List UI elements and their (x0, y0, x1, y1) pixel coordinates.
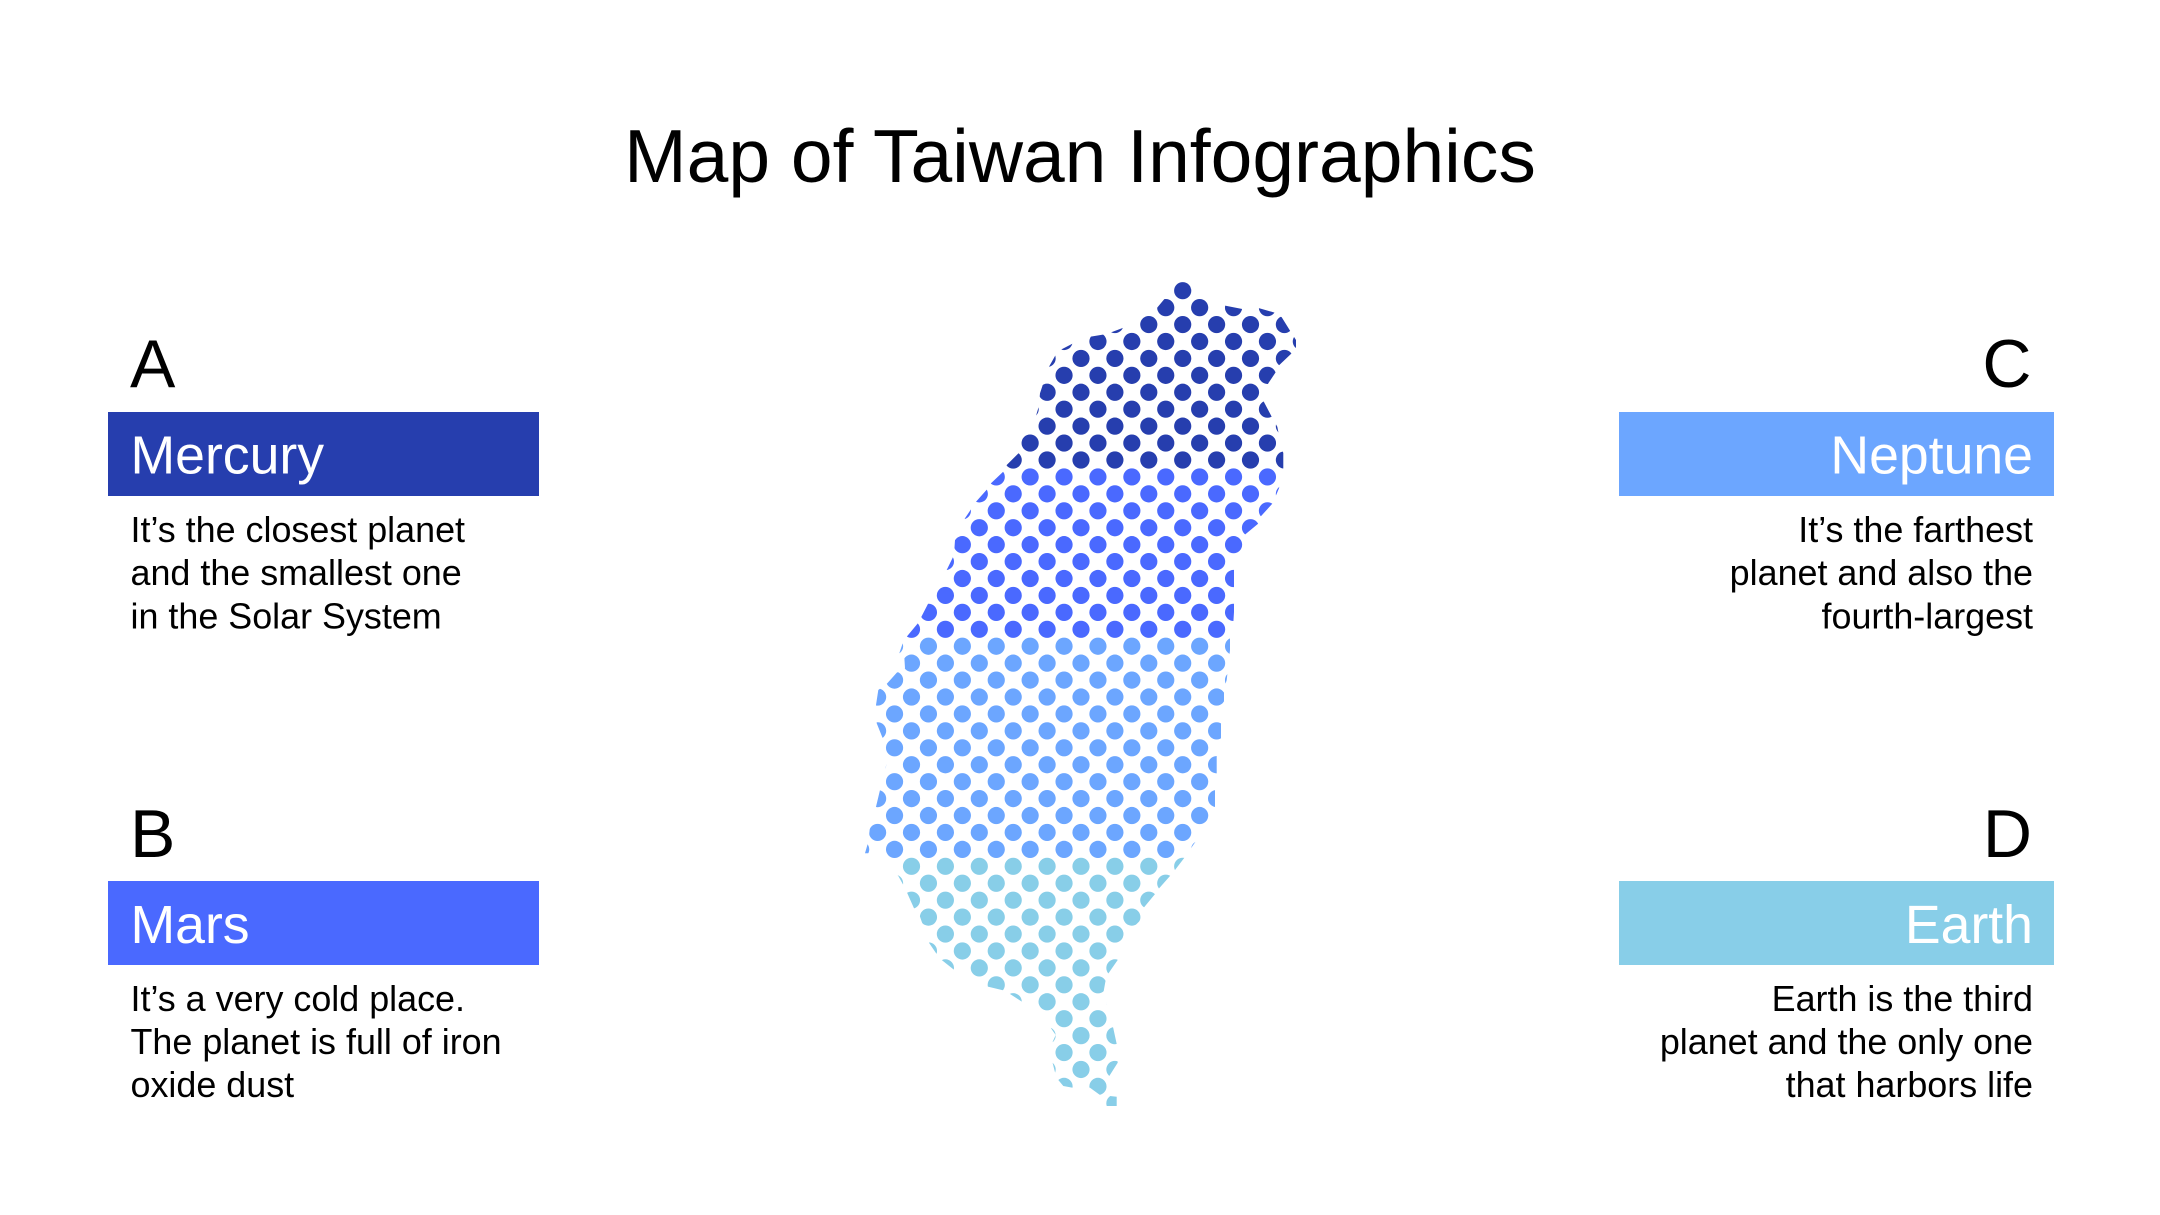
description: Mars: It’s a very cold place. (130, 979, 465, 1019)
description: Mars: The planet is full of iron (130, 1022, 502, 1062)
letter C: C (1982, 326, 2032, 402)
bar: Mars (108, 881, 539, 965)
dots: lower-middle region, light blue (865, 638, 1230, 858)
bar: Neptune: Neptune (1830, 426, 2033, 486)
title: Map of Taiwan Infographics (624, 114, 1536, 198)
dots: upper-middle region, medium blue (907, 468, 1280, 638)
panel: C Neptune (1619, 326, 2054, 636)
description: Neptune: planet and also the (1730, 553, 2033, 593)
bar: Neptune (1619, 412, 2054, 496)
letter A: A (130, 326, 176, 402)
letter B: B (130, 796, 175, 872)
dots: southern region, cyan (898, 858, 1184, 1106)
description: Mars: oxide dust (130, 1065, 294, 1105)
description: Earth: Earth is the third (1772, 979, 2033, 1019)
dots: northern region, dark blue (1006, 282, 1296, 469)
description: Neptune: It’s the farthest (1798, 510, 2033, 550)
map: halftone dotted Taiwan (844, 291, 1320, 1103)
panel: D Earth (1619, 796, 2054, 1105)
description: Mercury: It’s the closest planet (130, 510, 465, 550)
bar: Earth (1619, 881, 2054, 965)
description: Mercury: in the Solar System (130, 596, 442, 636)
panel: A Mercury (108, 326, 539, 636)
bar: Mercury (108, 412, 539, 496)
description: Earth: planet and the only one (1660, 1022, 2033, 1062)
description: Mercury: and the smallest one (130, 553, 462, 593)
panel: B Mars (108, 796, 539, 1105)
description: Neptune: fourth-largest (1822, 596, 2033, 636)
bar: Mars: Mars (130, 895, 250, 955)
description: Earth: that harbors life (1786, 1065, 2033, 1105)
letter D: D (1983, 796, 2032, 872)
bar: Earth: Earth (1905, 895, 2033, 955)
bar: Mercury: Mercury (130, 426, 324, 486)
